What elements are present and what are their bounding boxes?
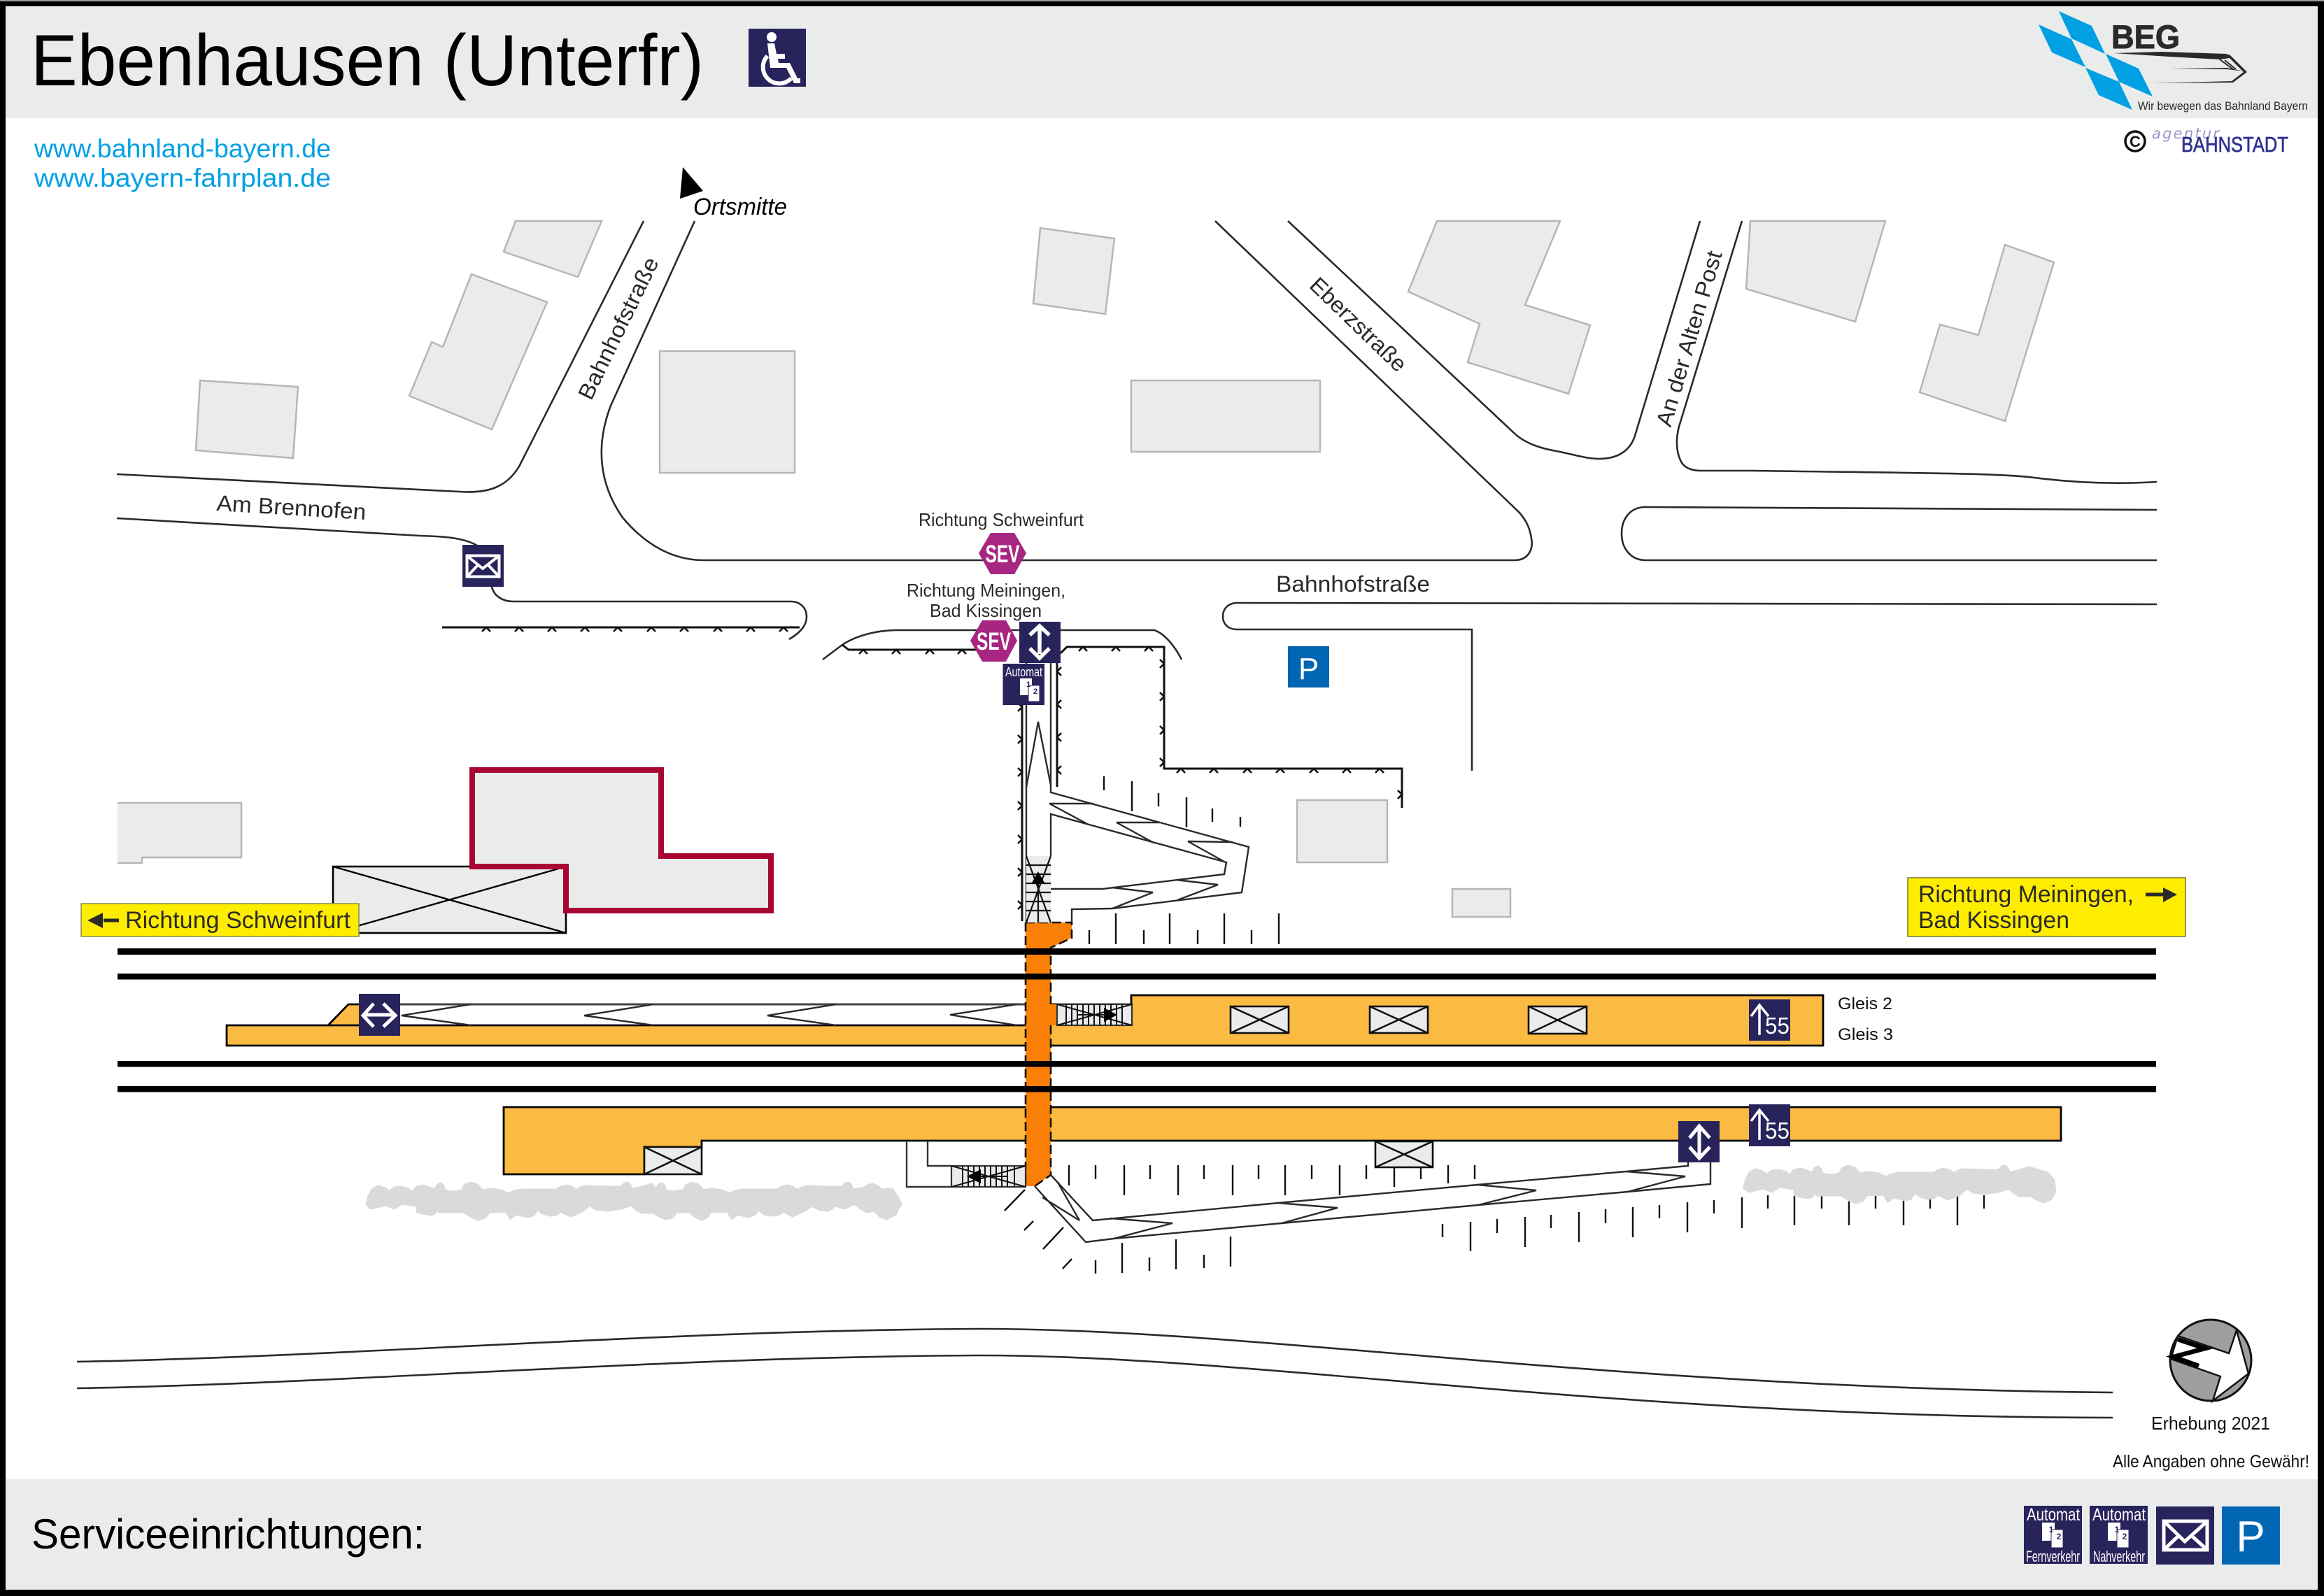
icon: SEV stop north — [979, 533, 1026, 574]
platform: Gleis 4 — [504, 1107, 2061, 1174]
direction sign: Schweinfurt: Richtung Schweinfurt — [125, 907, 351, 934]
icon: ticket machine regional: 1 — [2115, 1525, 2120, 1534]
title: Ebenhausen (Unterfr) — [31, 20, 704, 101]
icon: ticket machine regional: Automat — [2092, 1505, 2146, 1525]
copyright agentur BahnStadt: BAHNSTADT — [2181, 132, 2288, 157]
SEV label north: Richtung Schweinfurt — [919, 509, 1084, 530]
icon: step-free up/down south — [1678, 1121, 1720, 1162]
survey year: Erhebung 2021 — [2151, 1413, 2270, 1434]
road network — [77, 221, 2157, 1418]
street labels: Am Brennofen — [216, 490, 367, 525]
copyright agentur BahnStadt: agentur — [2152, 125, 2220, 142]
SEV label south — [907, 580, 1065, 621]
stairs platform Gleis 2/3 — [1057, 1004, 1132, 1025]
surrounding buildings — [118, 221, 2054, 917]
icon: ticket machine: Automat — [1005, 665, 1042, 679]
stairs platform Gleis 4 — [907, 1141, 1026, 1187]
neighbouring building — [333, 867, 566, 933]
icon: ticket machine regional: 2 — [2123, 1532, 2127, 1541]
embankment ticks — [1005, 776, 1984, 1274]
shelters on platforms — [644, 1006, 1587, 1174]
links — [34, 134, 331, 192]
SEV label south: Bad Kissingen — [930, 600, 1042, 621]
icon: ticket machine regional — [2090, 1505, 2148, 1565]
track labels — [1838, 995, 1893, 1044]
icon: step-free up/down north — [1019, 622, 1061, 663]
icon: post box — [462, 545, 504, 587]
street labels: Bahnhofstraße — [573, 253, 664, 404]
icon: wheelchair access — [749, 29, 806, 87]
SEV label south: Richtung Meiningen, — [907, 580, 1065, 601]
icon: post box legend — [2156, 1506, 2214, 1565]
access ramp south — [1035, 1162, 1710, 1242]
icon: ticket machine long distance: 1 — [2049, 1525, 2054, 1534]
direction sign: Schweinfurt — [81, 904, 359, 936]
direction arrow: Ortsmitte: Ortsmitte — [693, 194, 787, 220]
icon: SEV stop north: SEV — [985, 541, 1020, 568]
icon: platform height 55 Gleis 2/3: 55 — [1765, 1013, 1790, 1039]
BEG logo: Wir bewegen das Bahnland Bayern — [2138, 99, 2308, 113]
street labels: An der Alten Post — [1651, 248, 1727, 429]
street labels: Bahnhofstraße — [1276, 571, 1430, 597]
icon: parking legend: P — [2236, 1513, 2265, 1561]
footer band — [6, 1479, 2318, 1590]
compass — [2170, 1320, 2251, 1401]
header band — [6, 6, 2318, 118]
icon: platform height 55 Gleis 4 — [1749, 1104, 1790, 1146]
BEG logo: BEG — [2111, 18, 2180, 55]
icon: ticket machine long distance — [2024, 1505, 2082, 1565]
icon: parking legend — [2222, 1506, 2280, 1565]
icon: ticket machine: 1 — [1026, 681, 1030, 689]
icon: ramp left-right — [359, 994, 400, 1036]
BEG logo — [2039, 11, 2308, 113]
icon: platform height 55 Gleis 2/3 — [1749, 999, 1790, 1041]
icon: parking — [1288, 646, 1329, 687]
icon: SEV stop south: SEV — [977, 628, 1011, 655]
icon: ticket machine long distance: Fernverkehr — [2026, 1548, 2080, 1565]
track labels: Gleis 2 — [1838, 995, 1892, 1013]
footer heading: Serviceeinrichtungen: — [31, 1511, 425, 1558]
icon: ticket machine regional: Nahverkehr — [2093, 1548, 2145, 1565]
tracks — [118, 948, 2156, 1092]
vegetation east — [1745, 1167, 2055, 1202]
links: www.bahnland-bayern.de — [34, 134, 331, 163]
direction arrow: Ortsmitte — [680, 167, 787, 220]
copyright agentur BahnStadt: C — [2130, 133, 2141, 150]
copyright agentur BahnStadt — [2125, 125, 2288, 157]
icon: SEV stop south — [970, 620, 1017, 662]
direction sign: Meiningen: Bad Kissingen — [1918, 907, 2069, 934]
underpass — [1026, 922, 1072, 1186]
access ramp north — [1026, 661, 1249, 922]
icon: platform height 55 Gleis 4: 55 — [1765, 1118, 1790, 1143]
retaining walls — [442, 627, 1402, 921]
track labels: Gleis 3 — [1838, 1025, 1893, 1044]
platform: Gleis 2/3 — [227, 995, 1823, 1046]
direction sign: Meiningen: Richtung Meiningen, — [1918, 881, 2134, 908]
street labels: Eberzstraße — [1305, 272, 1412, 377]
icon: ticket machine long distance: Automat — [2027, 1505, 2080, 1525]
icon: ticket machine long distance: 2 — [2057, 1532, 2062, 1541]
direction sign: Meiningen — [1908, 878, 2185, 936]
street labels — [216, 248, 1727, 597]
vegetation west — [367, 1183, 900, 1219]
stairs north — [1026, 856, 1051, 922]
station building — [472, 770, 771, 911]
icon: ticket machine: 2 — [1033, 687, 1037, 696]
icon: ticket machine — [1003, 664, 1044, 705]
icon: parking: P — [1298, 652, 1319, 686]
links: www.bayern-fahrplan.de — [34, 164, 331, 192]
